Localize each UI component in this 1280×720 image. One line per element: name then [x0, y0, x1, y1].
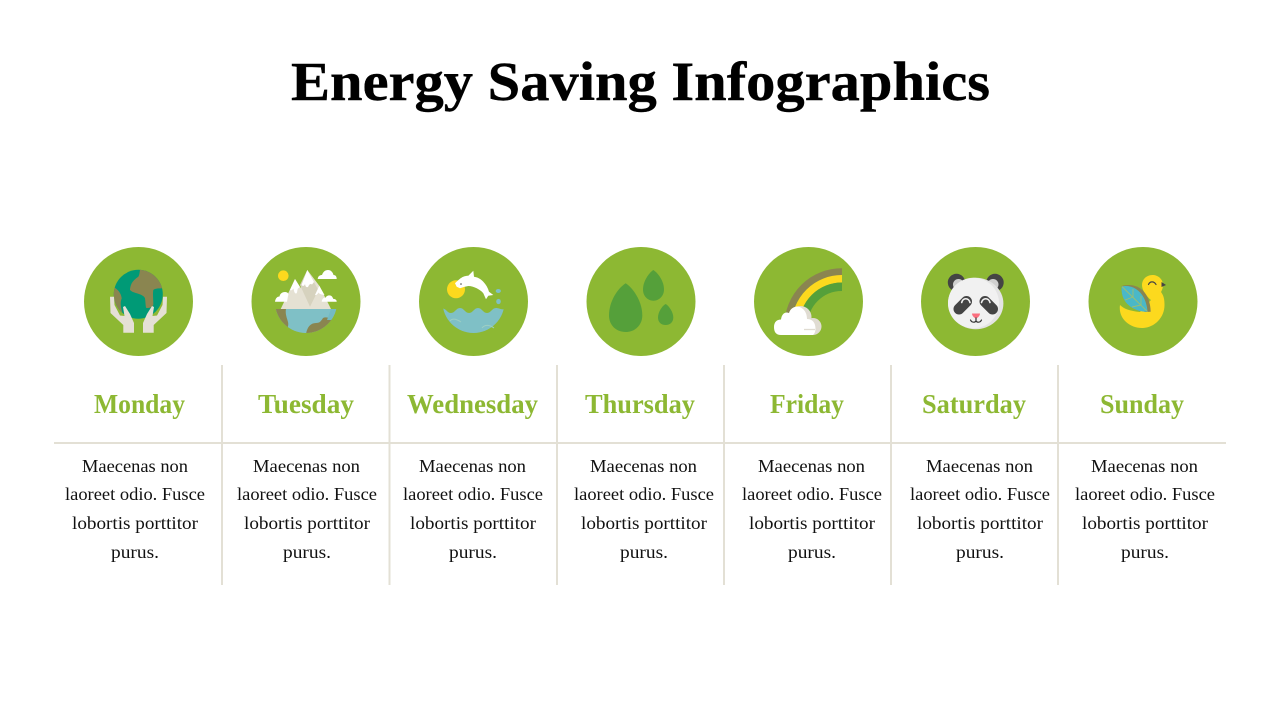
description: Saturday: laoreet odio. Fusce: [910, 484, 1050, 504]
description: Monday: laoreet odio. Fusce: [65, 484, 205, 504]
description: Monday: purus.: [111, 542, 159, 562]
description: Wednesday: [403, 456, 543, 562]
description: Tuesday: Maecenas non: [253, 456, 360, 476]
description: Saturday: [910, 456, 1050, 562]
description: Thursday: Maecenas non: [590, 456, 697, 476]
description: Sunday: lobortis porttitor: [1082, 513, 1208, 533]
column: Saturday: [910, 247, 1050, 562]
icon: panda: [921, 247, 1030, 356]
description: Thursday: lobortis porttitor: [581, 513, 707, 533]
description: Wednesday: laoreet odio. Fusce: [403, 484, 543, 504]
column: Sunday: [1075, 247, 1215, 562]
description: Thursday: purus.: [620, 542, 668, 562]
description: Friday: Maecenas non: [758, 456, 865, 476]
day: Tuesday: Tuesday: [258, 389, 354, 419]
icon: water drops: [586, 247, 696, 356]
icon: earth in hands: [84, 247, 193, 356]
column: Monday: [65, 247, 205, 562]
day: Saturday: Saturday: [922, 389, 1026, 419]
day: Friday: Friday: [770, 389, 844, 419]
description: Monday: Maecenas non: [82, 456, 188, 476]
description: Monday: lobortis porttitor: [72, 513, 198, 533]
description: Wednesday: Maecenas non: [419, 456, 526, 476]
description: Tuesday: laoreet odio. Fusce: [237, 484, 377, 504]
column: Friday: [742, 247, 882, 562]
description: Friday: purus.: [788, 542, 836, 562]
column: Wednesday: [403, 247, 543, 562]
icon: rainbow and cloud: [754, 247, 863, 356]
description: Friday: [742, 456, 882, 562]
icon: mountains and lake: [252, 247, 360, 356]
description: Monday: [65, 456, 205, 562]
day: Monday: Monday: [94, 389, 185, 419]
description: Friday: lobortis porttitor: [749, 513, 875, 533]
description: Wednesday: lobortis porttitor: [410, 513, 536, 533]
description: Thursday: laoreet odio. Fusce: [574, 484, 714, 504]
description: Sunday: laoreet odio. Fusce: [1075, 484, 1215, 504]
description: Sunday: purus.: [1121, 542, 1169, 562]
day: Wednesday: Wednesday: [407, 389, 538, 419]
description: Wednesday: purus.: [449, 542, 497, 562]
description: Saturday: lobortis porttitor: [917, 513, 1043, 533]
icon: dolphin over water: [419, 247, 528, 356]
day: Thursday: Thursday: [585, 389, 695, 419]
column: Thursday: [574, 247, 714, 562]
column: Tuesday: [237, 247, 377, 562]
description: Sunday: Maecenas non: [1091, 456, 1198, 476]
icon: leaf bird: [1088, 247, 1198, 356]
description: Saturday: purus.: [956, 542, 1004, 562]
description: Thursday: [574, 456, 714, 562]
description: Tuesday: lobortis porttitor: [244, 513, 370, 533]
description: Tuesday: [237, 456, 377, 562]
title: Energy Saving Infographics: [291, 51, 990, 112]
description: Sunday: [1075, 456, 1215, 562]
table grid lines: [54, 365, 1226, 585]
description: Saturday: Maecenas non: [926, 456, 1033, 476]
description: Friday: laoreet odio. Fusce: [742, 484, 882, 504]
day: Sunday: Sunday: [1100, 389, 1184, 419]
description: Tuesday: purus.: [283, 542, 331, 562]
